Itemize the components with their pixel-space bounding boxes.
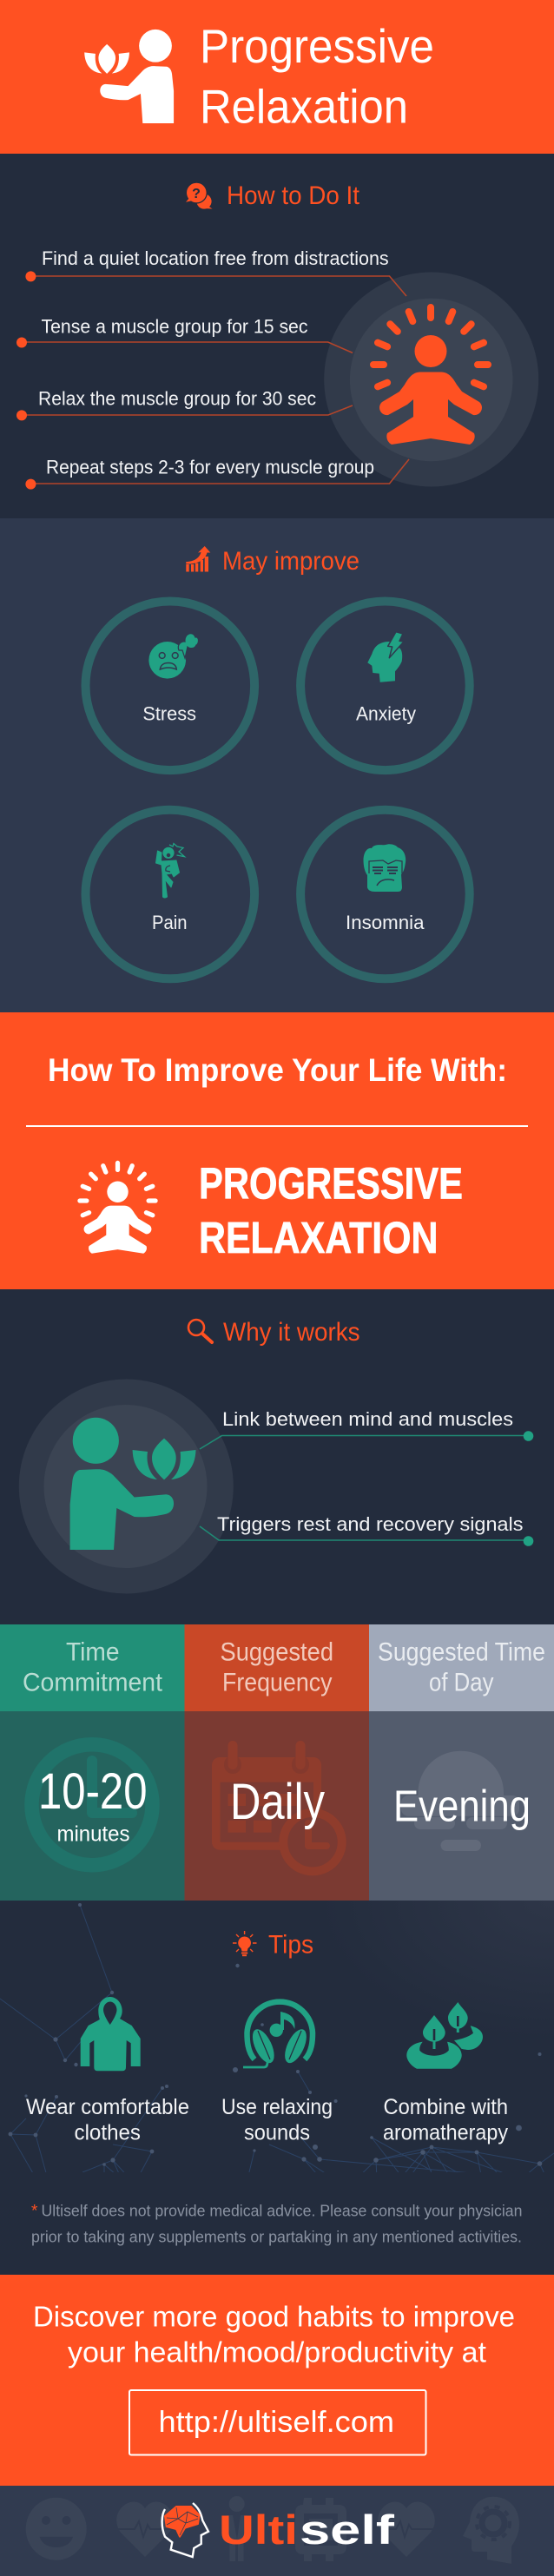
heading: tips: Tips [268, 1930, 313, 1959]
disclaimer: * [31, 2203, 38, 2221]
reason 2: Triggers rest and recovery signals [217, 1513, 523, 1535]
title: Progressive [200, 19, 434, 73]
card heading: Frequency [222, 1669, 332, 1697]
label: Insomnia [346, 912, 425, 933]
diagram: concentric circles [19, 1379, 234, 1594]
step 2: Tense a muscle group for 15 sec [42, 316, 307, 337]
icon: tired face [363, 844, 406, 892]
logo brain [165, 2507, 200, 2537]
logo wordmark: Ulti [219, 2507, 298, 2553]
icon: calendar background [212, 1741, 342, 1871]
banner heading: How To Improve Your Life With: [48, 1052, 507, 1088]
item: anxiety [300, 601, 470, 770]
disclaimer [31, 2203, 523, 2245]
tip: aromatherapy [383, 2002, 508, 2144]
icon: stressed face [148, 634, 198, 679]
icon: meditating person white [80, 1163, 155, 1254]
label [26, 2095, 189, 2144]
item: pain [85, 810, 254, 978]
icon: hoodie [81, 1997, 141, 2071]
card heading: Commitment [23, 1669, 163, 1697]
label: Pain [152, 912, 188, 933]
logo wordmark [219, 2507, 394, 2553]
step 2 [16, 316, 353, 352]
value: 10-20 minutes: 10-20 [38, 1763, 148, 1820]
step 4 [25, 456, 409, 490]
label [221, 2095, 333, 2144]
value: evening: Evening [393, 1782, 531, 1831]
icon: person holding lotus teal [70, 1418, 195, 1550]
card heading: Suggested [221, 1637, 333, 1666]
title [200, 19, 434, 134]
panel: banner [0, 1012, 554, 1289]
link button: http://ultiself.com [158, 2406, 394, 2439]
title: Relaxation [200, 80, 408, 134]
cta text: Discover more good habits to improve [33, 2300, 515, 2332]
banner title: RELAXATION [199, 1213, 438, 1262]
label: aromatherapy [383, 2120, 508, 2144]
card heading [23, 1637, 163, 1697]
footer background icons [26, 2496, 519, 2564]
card heading [378, 1637, 545, 1697]
card: suggested time of day [369, 1624, 554, 1901]
icon: clock background [31, 1744, 153, 1865]
banner title [199, 1159, 463, 1262]
value: 10-20 minutes: minutes [57, 1822, 130, 1847]
label: Combine with [384, 2095, 508, 2119]
icon: light bulb [233, 1931, 257, 1956]
label: Anxiety [356, 702, 416, 724]
card: time commitment [0, 1624, 184, 1901]
heading: may improve: May improve [222, 547, 359, 576]
step 1: Find a quiet location free from distractions [42, 247, 389, 269]
panel: how to do it [0, 154, 554, 518]
label: Use relaxing [221, 2095, 333, 2119]
icon: candles [406, 2002, 483, 2069]
item: stress [85, 601, 254, 770]
reason 1 [200, 1408, 533, 1449]
banner title: PROGRESSIVE [199, 1159, 463, 1209]
card heading: of Day [429, 1669, 493, 1697]
icon: headphones with note [243, 2002, 313, 2067]
value: 10-20 minutes [38, 1763, 148, 1847]
tip: relaxing sounds [221, 2002, 333, 2144]
step 3: Relax the muscle group for 30 sec [38, 387, 316, 410]
disclaimer: Ultiself does not provide medical advice. Please consult your physician [42, 2203, 523, 2220]
heading: how to do it: How to Do It [227, 181, 360, 210]
card heading: Time [66, 1637, 120, 1666]
label: Wear comfortable [26, 2095, 189, 2119]
panel: why it works [0, 1289, 554, 1624]
card: suggested frequency [184, 1624, 369, 1901]
icon: magnifying glass [188, 1320, 212, 1342]
link button [129, 2390, 425, 2455]
panel: tips [0, 1901, 554, 2275]
icon: question bubbles: ? [192, 187, 201, 201]
reason 1: Link between mind and muscles [222, 1408, 513, 1430]
reason 2 [200, 1513, 533, 1546]
step 3 [16, 387, 353, 420]
label: Stress [142, 702, 196, 724]
logo: ultiself [162, 2503, 394, 2557]
cta text: your health/mood/productivity at [68, 2336, 486, 2368]
value: daily: Daily [230, 1774, 325, 1830]
card heading [221, 1637, 333, 1697]
panel: header [0, 0, 554, 154]
icon: meditating person [373, 307, 488, 445]
diagram: concentric circles [324, 273, 538, 486]
panel: footer [0, 2486, 554, 2576]
tip: comfortable clothes [26, 1997, 189, 2144]
cta text [33, 2300, 515, 2368]
icon: person holding lotus [84, 30, 174, 123]
icon: question bubbles [186, 181, 212, 209]
heading: why it works: Why it works [223, 1318, 359, 1347]
step 4: Repeat steps 2-3 for every muscle group [46, 456, 374, 478]
panel: call to action [0, 2275, 554, 2486]
label: clothes [75, 2120, 141, 2144]
label: sounds [244, 2120, 310, 2144]
icon: setting sun background [401, 1751, 519, 1851]
icon: figure in pain [156, 844, 184, 898]
logo wordmark: self [300, 2507, 394, 2553]
step 1 [25, 247, 406, 296]
item: insomnia [300, 810, 470, 978]
disclaimer: prior to taking any supplements or partaking in any mentioned activities. [31, 2228, 522, 2245]
icon: head with bolt [367, 632, 404, 682]
label [383, 2095, 508, 2144]
panel: may improve [0, 518, 554, 1012]
logo head outline [162, 2503, 208, 2557]
icon: rising chart [186, 546, 210, 571]
